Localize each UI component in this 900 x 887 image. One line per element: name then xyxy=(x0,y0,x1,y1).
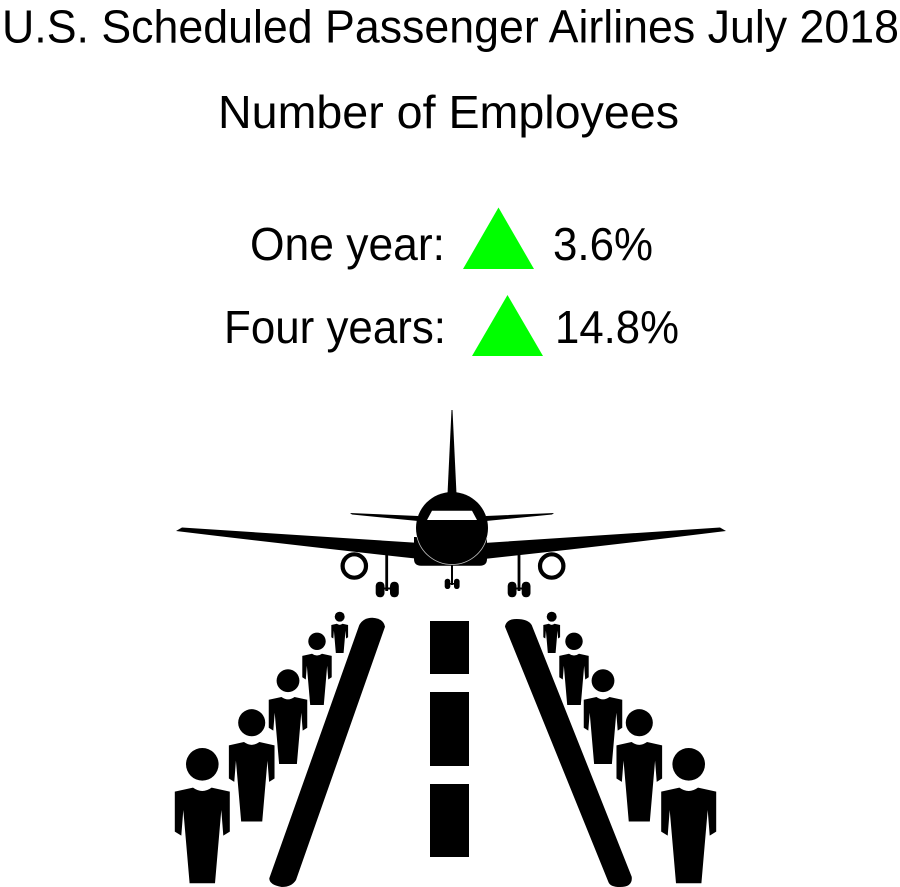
stat: one year change xyxy=(250,208,653,270)
employees left row xyxy=(175,612,348,883)
person left 2 xyxy=(229,709,275,821)
label: four years: Four years: xyxy=(224,301,446,353)
person left 3 xyxy=(269,669,307,764)
windshield xyxy=(427,511,477,520)
center dash 3 xyxy=(430,784,469,857)
value: one year: 3.6% xyxy=(553,218,653,270)
right landing gear xyxy=(508,555,530,597)
runway xyxy=(269,618,632,887)
title: U.S. Scheduled Passenger Airlines July 2018 xyxy=(2,0,899,52)
subtitle: Number of Employees xyxy=(218,86,679,138)
tailplanes xyxy=(350,513,554,521)
wings xyxy=(176,528,726,559)
person right 3 xyxy=(584,669,622,764)
left engine xyxy=(343,554,366,578)
employees right row xyxy=(543,612,716,883)
stat: four year change xyxy=(224,295,679,356)
belly fairing xyxy=(414,537,487,566)
person right 4 xyxy=(559,633,589,705)
left landing gear xyxy=(376,555,399,597)
icon: airplane front view xyxy=(176,410,726,597)
icon: green up triangle, four years xyxy=(472,295,543,356)
fuselage xyxy=(416,492,488,564)
right engine xyxy=(540,554,563,578)
tail fin xyxy=(448,410,456,494)
person left 1 xyxy=(175,748,230,883)
left runway edge xyxy=(269,618,385,887)
person left 5 xyxy=(331,612,348,653)
value: four years: 14.8% xyxy=(555,301,679,353)
icon: green up triangle, one year xyxy=(463,208,534,269)
fuselage outline xyxy=(417,537,487,565)
label: one year: One year: xyxy=(250,218,445,270)
person right 1 xyxy=(661,748,716,883)
right runway edge xyxy=(505,619,632,887)
person right 2 xyxy=(616,709,662,821)
center dash 1 xyxy=(430,621,469,674)
person right 5 xyxy=(543,612,560,653)
person left 4 xyxy=(302,633,332,705)
center dash 2 xyxy=(430,692,469,766)
nose gear xyxy=(445,565,460,589)
